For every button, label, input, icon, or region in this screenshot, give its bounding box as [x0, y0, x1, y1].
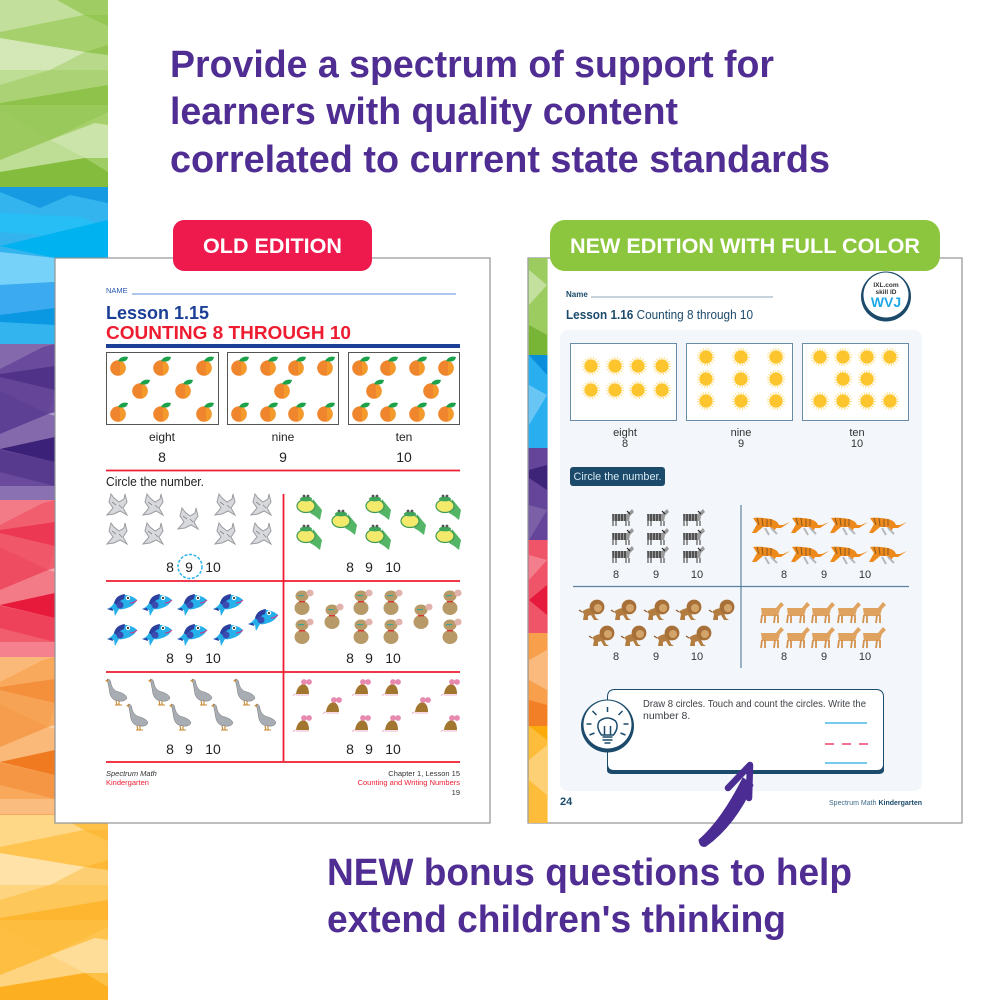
instruction: Circle the number. [106, 475, 204, 489]
instruction tag [570, 467, 665, 486]
number words [149, 430, 412, 465]
IXL badge: IXL.com [873, 282, 899, 289]
bonus question text: number 8. [643, 710, 690, 722]
number words: ten [396, 430, 412, 444]
answer numbers: 9 [653, 651, 659, 663]
number words: 9 [738, 438, 744, 450]
panel: new edition page [528, 258, 962, 823]
answer numbers [166, 559, 401, 757]
red grid [106, 494, 460, 762]
number words: eight [149, 430, 176, 444]
peach box: nine [228, 352, 338, 424]
dashed answer circle [178, 554, 202, 578]
answer numbers: 8 [166, 559, 174, 575]
tigers [752, 518, 907, 564]
lesson heading: Lesson 1.16 Counting 8 through 10 [566, 307, 753, 322]
IXL badge [861, 272, 911, 322]
divider grid [573, 505, 909, 668]
mice [293, 679, 460, 732]
answer numbers: 8 [346, 741, 354, 757]
answer numbers: 9 [185, 559, 193, 575]
answer numbers: 9 [653, 569, 659, 581]
writing lines [825, 723, 868, 763]
footer right: 19 [452, 788, 460, 797]
answer numbers: 9 [185, 741, 193, 757]
answer numbers: 8 [346, 650, 354, 666]
answer numbers: 9 [365, 741, 373, 757]
answer numbers: 10 [205, 650, 221, 666]
left colour stripe [0, 0, 108, 1000]
number words: nine [731, 427, 751, 439]
lesson subtitle: COUNTING 8 THROUGH 10 [106, 323, 351, 343]
IXL badge: skill ID [876, 289, 897, 296]
bottom caption [327, 852, 852, 941]
cats [107, 494, 271, 544]
band: red [0, 500, 108, 657]
number words: 9 [279, 449, 287, 465]
title: Provide a spectrum of support for [170, 44, 774, 86]
footer right [358, 769, 460, 797]
frogs [297, 495, 461, 550]
geese [105, 679, 276, 730]
answer numbers: 8 [166, 741, 174, 757]
footer left: Kindergarten [106, 778, 149, 787]
fish [107, 594, 278, 646]
bonus question text [643, 698, 866, 722]
answer numbers: 10 [385, 650, 401, 666]
bonus question callout [581, 689, 884, 774]
number words [613, 427, 865, 450]
number words: ten [849, 427, 865, 439]
title [170, 44, 830, 181]
badge: new edition: NEW EDITION WITH FULL COLOR [570, 235, 920, 258]
lesson heading: Lesson 1.15 [106, 303, 209, 323]
sun box: ten [802, 344, 908, 420]
panel: old edition page [55, 258, 490, 823]
name line: NAME [106, 286, 128, 295]
page colour strip [529, 258, 548, 823]
badge: new edition [550, 220, 940, 271]
lions [579, 600, 734, 646]
arrow [699, 765, 753, 846]
answer numbers: 9 [821, 569, 827, 581]
name line: Name [566, 290, 588, 299]
answer numbers: 9 [821, 651, 827, 663]
answer numbers: 8 [613, 569, 619, 581]
horses [761, 602, 886, 648]
zebras [612, 509, 705, 563]
badge: old edition: OLD EDITION [203, 235, 342, 258]
sun box: nine [686, 344, 792, 420]
answer numbers: 10 [691, 569, 703, 581]
instruction tag: Circle the number. [574, 471, 662, 483]
bonus question text: Draw 8 circles. Touch and count the circles. Write the [643, 698, 866, 710]
number words: 10 [396, 449, 412, 465]
title: learners with quality content [170, 91, 678, 133]
band: green [0, 0, 108, 187]
answer numbers: 10 [205, 559, 221, 575]
worksheet panel [560, 330, 922, 791]
answer numbers: 10 [859, 651, 871, 663]
answer numbers: 10 [385, 559, 401, 575]
band: orange [0, 657, 108, 815]
IXL badge: WVJ [871, 294, 901, 310]
answer numbers: 8 [781, 651, 787, 663]
footer left: Spectrum Math [106, 769, 157, 778]
answer numbers: 8 [781, 569, 787, 581]
number words: 8 [158, 449, 166, 465]
band: purple [0, 344, 108, 501]
page number: 24 [560, 796, 573, 808]
footer right: Counting and Writing Numbers [358, 778, 460, 787]
bottom caption: NEW bonus questions to help [327, 852, 852, 894]
number words: nine [272, 430, 295, 444]
answer numbers: 9 [365, 650, 373, 666]
title: correlated to current state standards [170, 139, 830, 181]
answer numbers: 9 [365, 559, 373, 575]
answer numbers: 8 [613, 651, 619, 663]
icon: light bulb [581, 700, 634, 752]
footer: Spectrum Math Kindergarten [829, 800, 922, 807]
bottom caption: extend children's thinking [327, 899, 786, 941]
band: blue [0, 187, 108, 344]
answer numbers: 10 [859, 569, 871, 581]
peach box: ten [348, 352, 460, 424]
answer numbers: 10 [691, 651, 703, 663]
badge: old edition [173, 220, 372, 271]
number words: 8 [622, 438, 628, 450]
answer numbers: 8 [166, 650, 174, 666]
answer numbers: 10 [205, 741, 221, 757]
answer numbers: 9 [185, 650, 193, 666]
footer left [106, 769, 157, 787]
footer right: Chapter 1, Lesson 15 [388, 769, 460, 778]
answer numbers [613, 569, 871, 663]
dogs [294, 590, 462, 644]
answer numbers: 8 [346, 559, 354, 575]
number words: eight [613, 427, 637, 439]
band: yellow [0, 815, 108, 1000]
number words: 10 [851, 438, 863, 450]
sun box: eight [570, 344, 676, 420]
answer numbers: 10 [385, 741, 401, 757]
peach box: eight [106, 352, 218, 424]
